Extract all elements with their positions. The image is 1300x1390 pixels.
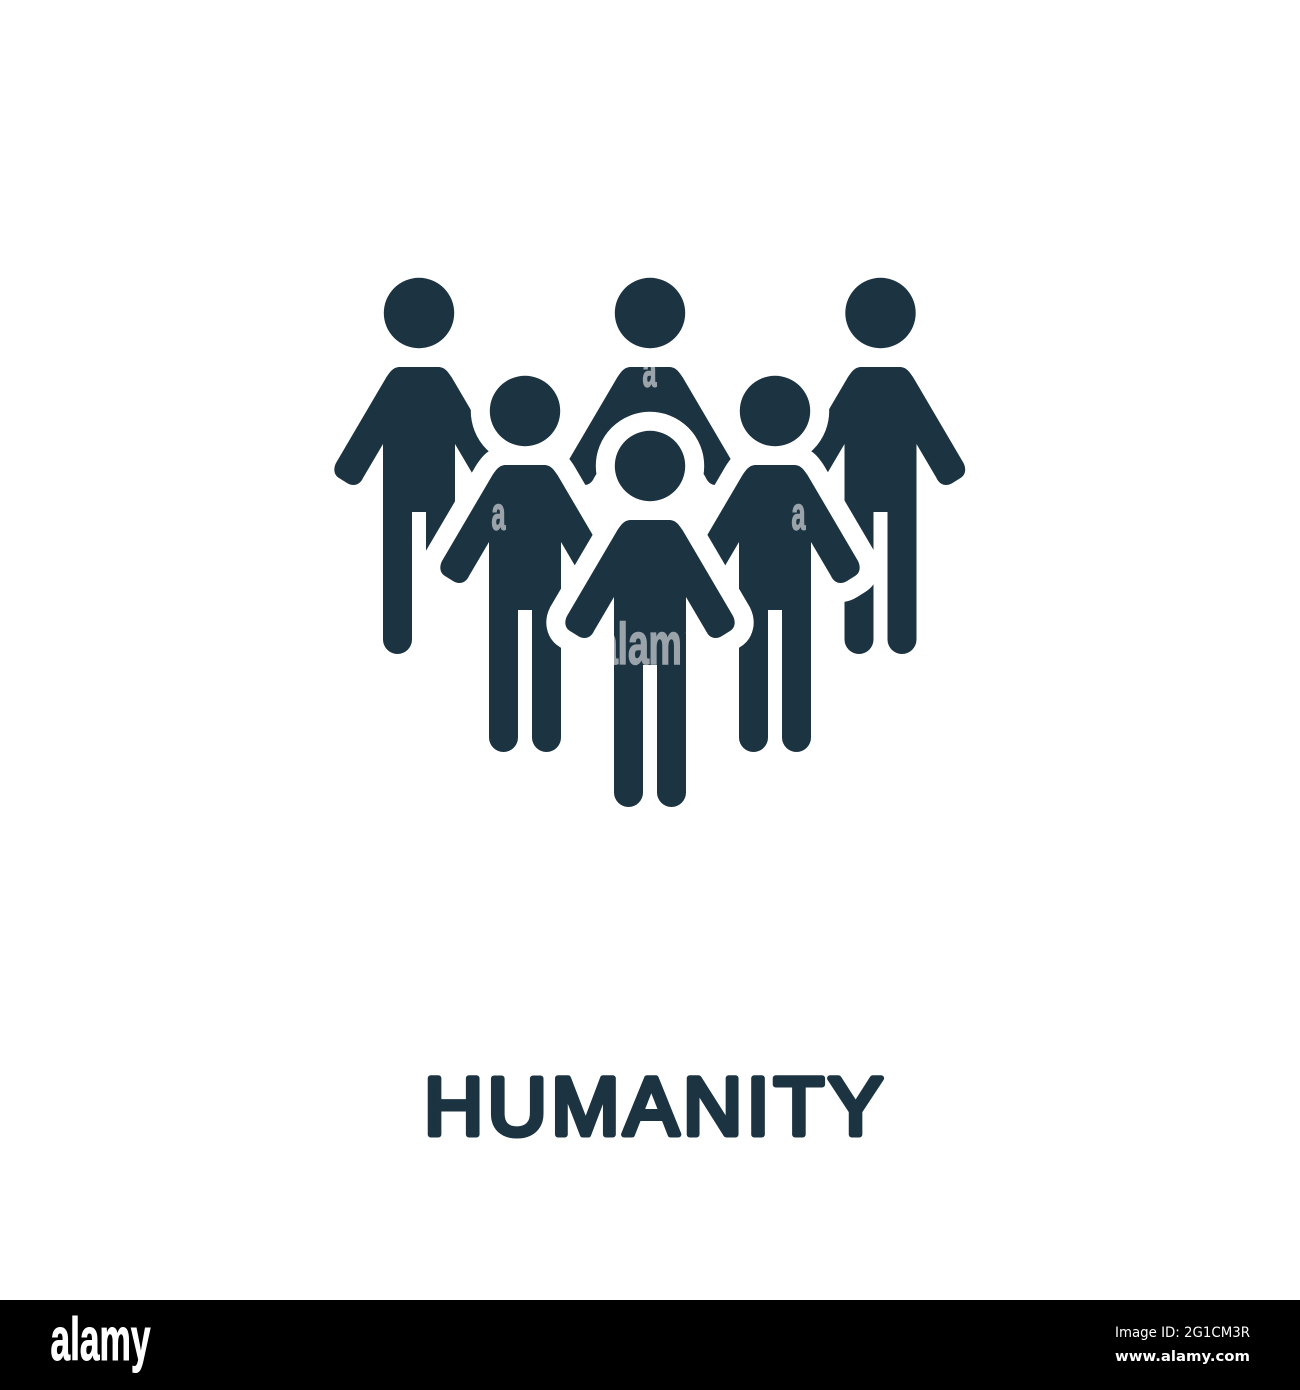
person: middle left [440, 376, 610, 752]
watermark fragments: a [492, 488, 506, 540]
title: HUMANITY [424, 1062, 883, 1152]
person: back right [796, 278, 965, 654]
person: front centre [565, 431, 735, 807]
person: back centre [565, 278, 735, 654]
watermark fragments [492, 344, 806, 677]
person: middle right [690, 376, 860, 752]
website: www.alamy.com [1115, 1349, 1250, 1365]
person: back left [334, 278, 504, 662]
watermark fragments: alamy [597, 613, 707, 677]
footer bar [0, 1300, 1300, 1390]
icon: group of six people [334, 278, 965, 807]
watermark fragments: a [792, 488, 806, 540]
image id: Image ID: 2G1CM3R [1115, 1325, 1250, 1341]
footer logo: alamy [50, 1306, 151, 1373]
watermark fragments: a [642, 344, 657, 396]
